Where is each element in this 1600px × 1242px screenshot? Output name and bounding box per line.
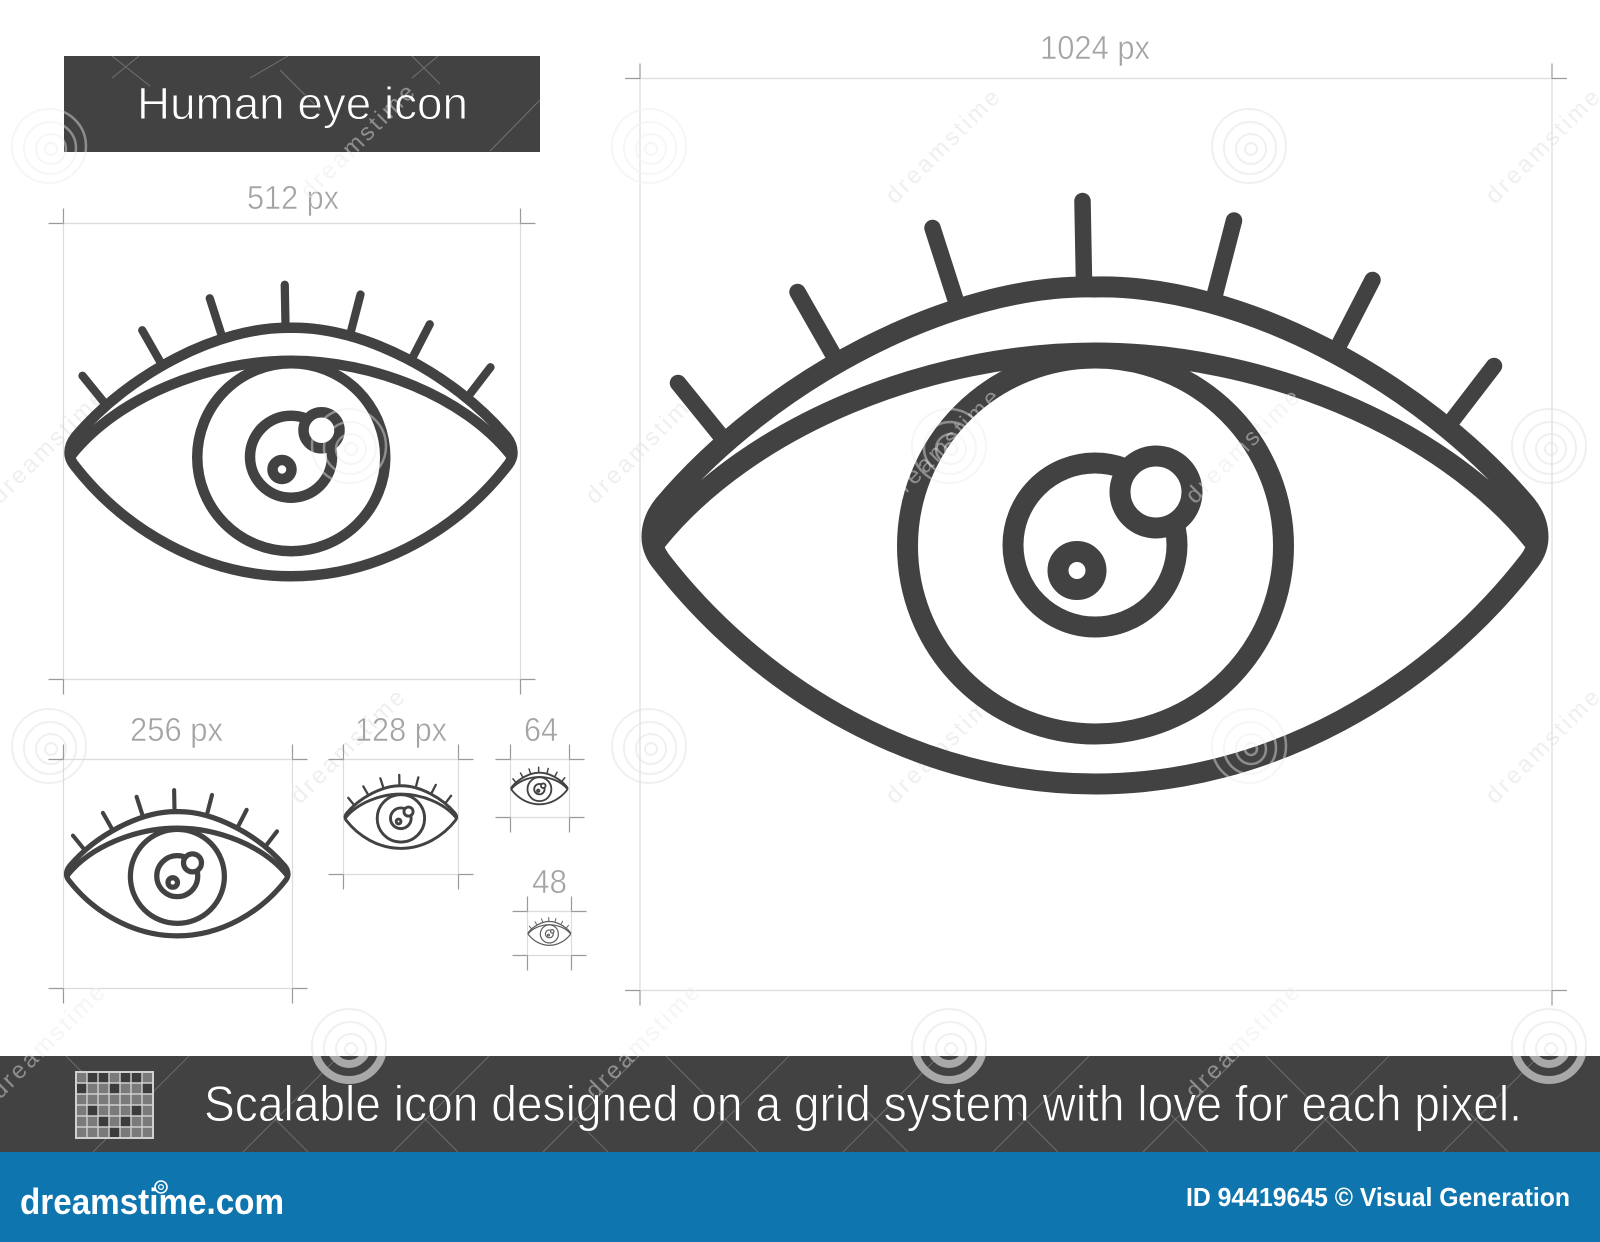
watermark layer on white: dreamstime — [580, 979, 705, 1104]
footer bar — [0, 1152, 1600, 1242]
panel: 512 px preview — [48, 179, 536, 694]
panel: 48 px preview — [512, 863, 586, 970]
icon: eye 512 — [70, 285, 512, 576]
label: 1024 px: 1024 px — [1040, 29, 1150, 66]
tagline bar — [0, 979, 1600, 1152]
image ID and credit: ID 94419645 © Visual Generation — [1186, 1182, 1570, 1212]
icon: eye 128 — [345, 775, 457, 848]
tagline bar: dreamstime — [1180, 979, 1305, 1104]
watermark layer on white: dreamstime — [580, 384, 705, 509]
label: 128 px: 128 px — [355, 711, 447, 748]
title banner — [64, 56, 540, 152]
watermark layer on white: dreamstime — [880, 84, 1005, 209]
tagline text: Scalable icon designed on a grid system with love for each pixel. — [204, 1076, 1522, 1132]
watermark layer on white: dreamstime — [1180, 979, 1305, 1104]
panel: 128 px preview — [328, 711, 474, 890]
label: 48: 48 — [532, 863, 567, 900]
watermark overlay — [12, 79, 1305, 783]
frame: 128 px — [328, 744, 474, 890]
icon: eye 1024 — [652, 201, 1538, 784]
tagline bar: dreamstime — [580, 979, 705, 1104]
frame: 48 px — [512, 896, 586, 970]
icon: pixel grid — [76, 1072, 153, 1138]
frame: 512 px — [48, 208, 536, 694]
label: 512 px: 512 px — [247, 179, 339, 216]
panel: 64 px preview — [496, 711, 584, 832]
label: 256 px: 256 px — [130, 711, 223, 748]
label: 64: 64 — [524, 711, 558, 748]
watermark layer on white: dreamstime — [1180, 384, 1305, 509]
watermark layer on white: dreamstime — [285, 684, 410, 809]
frame: 256 px — [48, 744, 308, 1004]
title banner: Human eye icon — [137, 78, 468, 129]
watermark overlay: dreamstime — [880, 384, 1005, 509]
watermark overlay: dreamstime — [295, 79, 420, 204]
panel: 1024 px preview — [625, 29, 1567, 1006]
watermark layer on white: dreamstime — [880, 684, 1005, 809]
frame: 1024 px — [625, 64, 1567, 1006]
panel: 256 px preview — [48, 711, 308, 1004]
icon: eye 64 — [511, 767, 568, 804]
logo: dreamstime.com: dreamstime.com — [20, 1181, 284, 1222]
icon: eye 48 — [528, 917, 571, 945]
icon: eye 256 — [66, 790, 288, 936]
watermark layer on white: dreamstime — [295, 79, 420, 204]
watermark overlay: dreamstime — [1180, 384, 1305, 509]
frame: 64 px — [496, 744, 584, 832]
